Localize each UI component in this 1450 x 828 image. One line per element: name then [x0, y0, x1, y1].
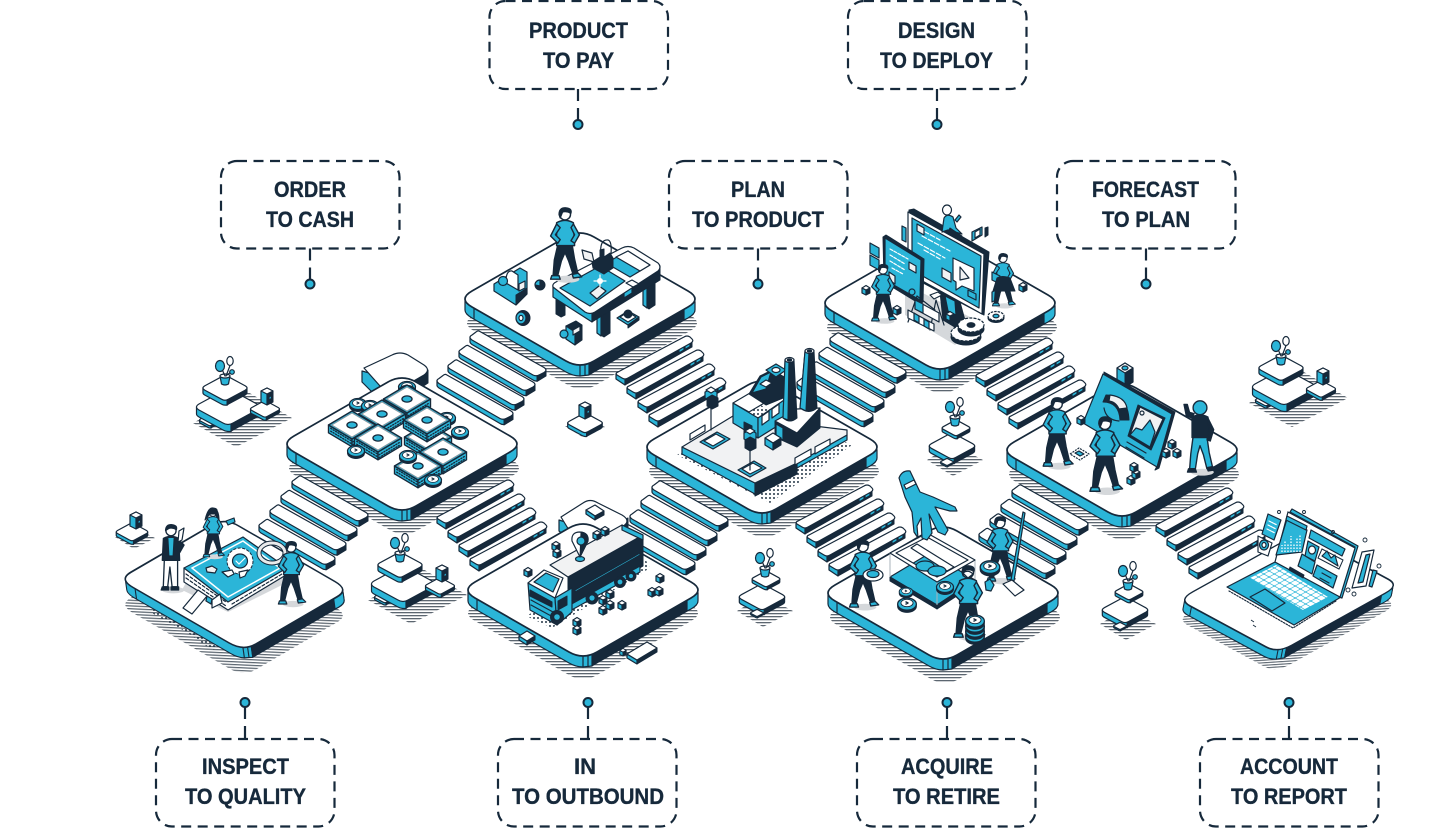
icon: sphere [535, 280, 545, 290]
person: carrying ring [872, 264, 896, 324]
icon: banknote stacks [328, 385, 467, 488]
callout: order to cash: TO CASH [266, 207, 354, 232]
icon: CNC machine [553, 240, 660, 337]
panel: plan to product platform with factory [647, 348, 877, 524]
icon: small cart [1077, 416, 1181, 458]
icon: quality manual book [182, 537, 290, 614]
person: woman at centre [1090, 417, 1122, 495]
person: worker in helmet [551, 208, 582, 283]
icon: floating report sheet [1262, 514, 1281, 540]
icon: location pin [572, 532, 588, 562]
callout: order to cash [221, 161, 400, 288]
decorative hatched shadows [115, 257, 1402, 683]
callout: design to deploy [848, 1, 1026, 129]
panel: inspect to quality platform with book [116, 508, 353, 663]
callout: plan to product: TO PRODUCT [692, 207, 825, 232]
panel: acquire to retire platform with glass case [828, 471, 1058, 670]
icon: tablet panel [883, 235, 924, 304]
person: man at right [1184, 401, 1216, 476]
icon: small crate [626, 280, 639, 296]
stairs: order to cash, lower left [259, 476, 368, 570]
callout: in to outbound: TO OUTBOUND [512, 784, 664, 809]
callout: product to pay: TO PAY [543, 48, 614, 73]
stairs: product to pay, lower left [437, 331, 546, 425]
icon: side tile left [519, 631, 535, 645]
floating tile stack: upper left [196, 356, 279, 432]
callout: account to report: ACCOUNT [1240, 754, 1338, 779]
stairs: plan to product, lower right [796, 485, 906, 576]
floating tile with box: centre [568, 402, 602, 436]
icon: tilted dashboard panel [1083, 372, 1175, 470]
icon: chimneys [783, 348, 817, 421]
callout: product to pay: PRODUCT [529, 18, 629, 43]
icon: gears [951, 312, 1004, 345]
floating tile stack: upper right [1252, 336, 1335, 412]
icon: server box [1117, 363, 1133, 387]
panel: order to cash platform with money [287, 378, 517, 521]
panel: design to deploy platform with monitor [825, 205, 1055, 380]
person: seated on monitor [942, 205, 962, 236]
icon: large monitor [905, 209, 989, 345]
person: woman at left [1043, 398, 1073, 470]
callout: plan to product [669, 161, 848, 288]
person: man stepping on coins [954, 566, 994, 641]
callout: in to outbound: IN [574, 754, 596, 779]
icon: parcels [524, 526, 664, 635]
callout: order to cash: ORDER [274, 177, 346, 202]
panel: forecast to plan platform with chart board [1007, 363, 1237, 527]
back tile behind order to cash [362, 353, 428, 395]
callout: inspect to quality [156, 698, 334, 826]
callout: inspect to quality: INSPECT [202, 754, 290, 779]
stairs: design to deploy, lower right [976, 338, 1086, 429]
icon: small machine part [494, 268, 527, 305]
person: woman with box [992, 253, 1015, 309]
icon: side tile right [620, 642, 657, 664]
icon: coins, back row [350, 382, 468, 440]
panel: account to report platform with laptop [1172, 509, 1404, 666]
stairs: order to cash, lower right [437, 480, 547, 571]
icon: stacked boxes [1127, 462, 1140, 485]
icon: floating bar panel [1352, 550, 1377, 588]
icon: giant hand [899, 471, 957, 540]
callout: inspect to quality: TO QUALITY [185, 784, 306, 809]
icon: machined nut [516, 310, 530, 326]
callout: account to report: TO REPORT [1231, 784, 1347, 809]
icon: floating gauge [1258, 536, 1272, 556]
icon: robot arms [705, 387, 756, 470]
floating tile with box: left [116, 512, 148, 544]
person: inspector with clipboard [161, 525, 184, 593]
callout: product to pay [490, 1, 668, 129]
icon: display case [890, 533, 975, 609]
icon: factory site base [682, 416, 847, 496]
callout: account to report [1200, 698, 1378, 826]
icon: coins, front row [348, 446, 442, 488]
back tile behind outbound platform [559, 500, 628, 540]
person: man with magnifier [278, 542, 306, 607]
callout: forecast to plan: TO PLAN [1102, 207, 1190, 232]
callout: design to deploy: DESIGN [898, 18, 975, 43]
callout: forecast to plan: FORECAST [1092, 177, 1199, 202]
callout: design to deploy: TO DEPLOY [880, 48, 993, 73]
icon: small markers [1251, 510, 1381, 627]
floating plant stack: centre right [927, 398, 983, 476]
panel: product to pay platform with CNC machine [465, 208, 695, 376]
icon: chip [1070, 448, 1089, 460]
callout: forecast to plan [1057, 161, 1236, 288]
stairs: forecast to plan, lower left [979, 485, 1088, 579]
callout: plan to product: PLAN [731, 177, 785, 202]
callout: acquire to retire [857, 698, 1036, 826]
icon: truck [526, 525, 650, 628]
callout: acquire to retire: TO RETIRE [893, 784, 1000, 809]
icon: coin stacks [898, 561, 1000, 644]
person: woman running [203, 508, 235, 559]
icon: magnifier [259, 543, 295, 576]
floating plant stack: lower right [1100, 562, 1156, 640]
callout: acquire to retire: ACQUIRE [901, 754, 993, 779]
icon: floating media tiles [870, 226, 996, 302]
stairs: forecast to plan, lower right [1156, 488, 1266, 579]
stairs: product to pay, lower right [616, 336, 726, 427]
floating tile stack: lower left [372, 534, 454, 608]
icon: loose cubes [862, 282, 1027, 321]
icon: laptop [1227, 509, 1358, 628]
icon: factory building [733, 364, 820, 450]
panel: in to outbound platform with truck [468, 524, 698, 667]
stairs: plan to product, lower left [619, 481, 728, 575]
person: left runner [850, 540, 883, 610]
floating plant stack: lower centre [737, 548, 793, 627]
stairs: design to deploy, lower left [797, 333, 906, 427]
icon: construction barrier [908, 289, 944, 331]
callout: in to outbound [498, 698, 676, 826]
person: woman with broom [987, 512, 1025, 596]
icon: bracket block [560, 321, 582, 345]
icon: plate with dome [617, 310, 639, 328]
